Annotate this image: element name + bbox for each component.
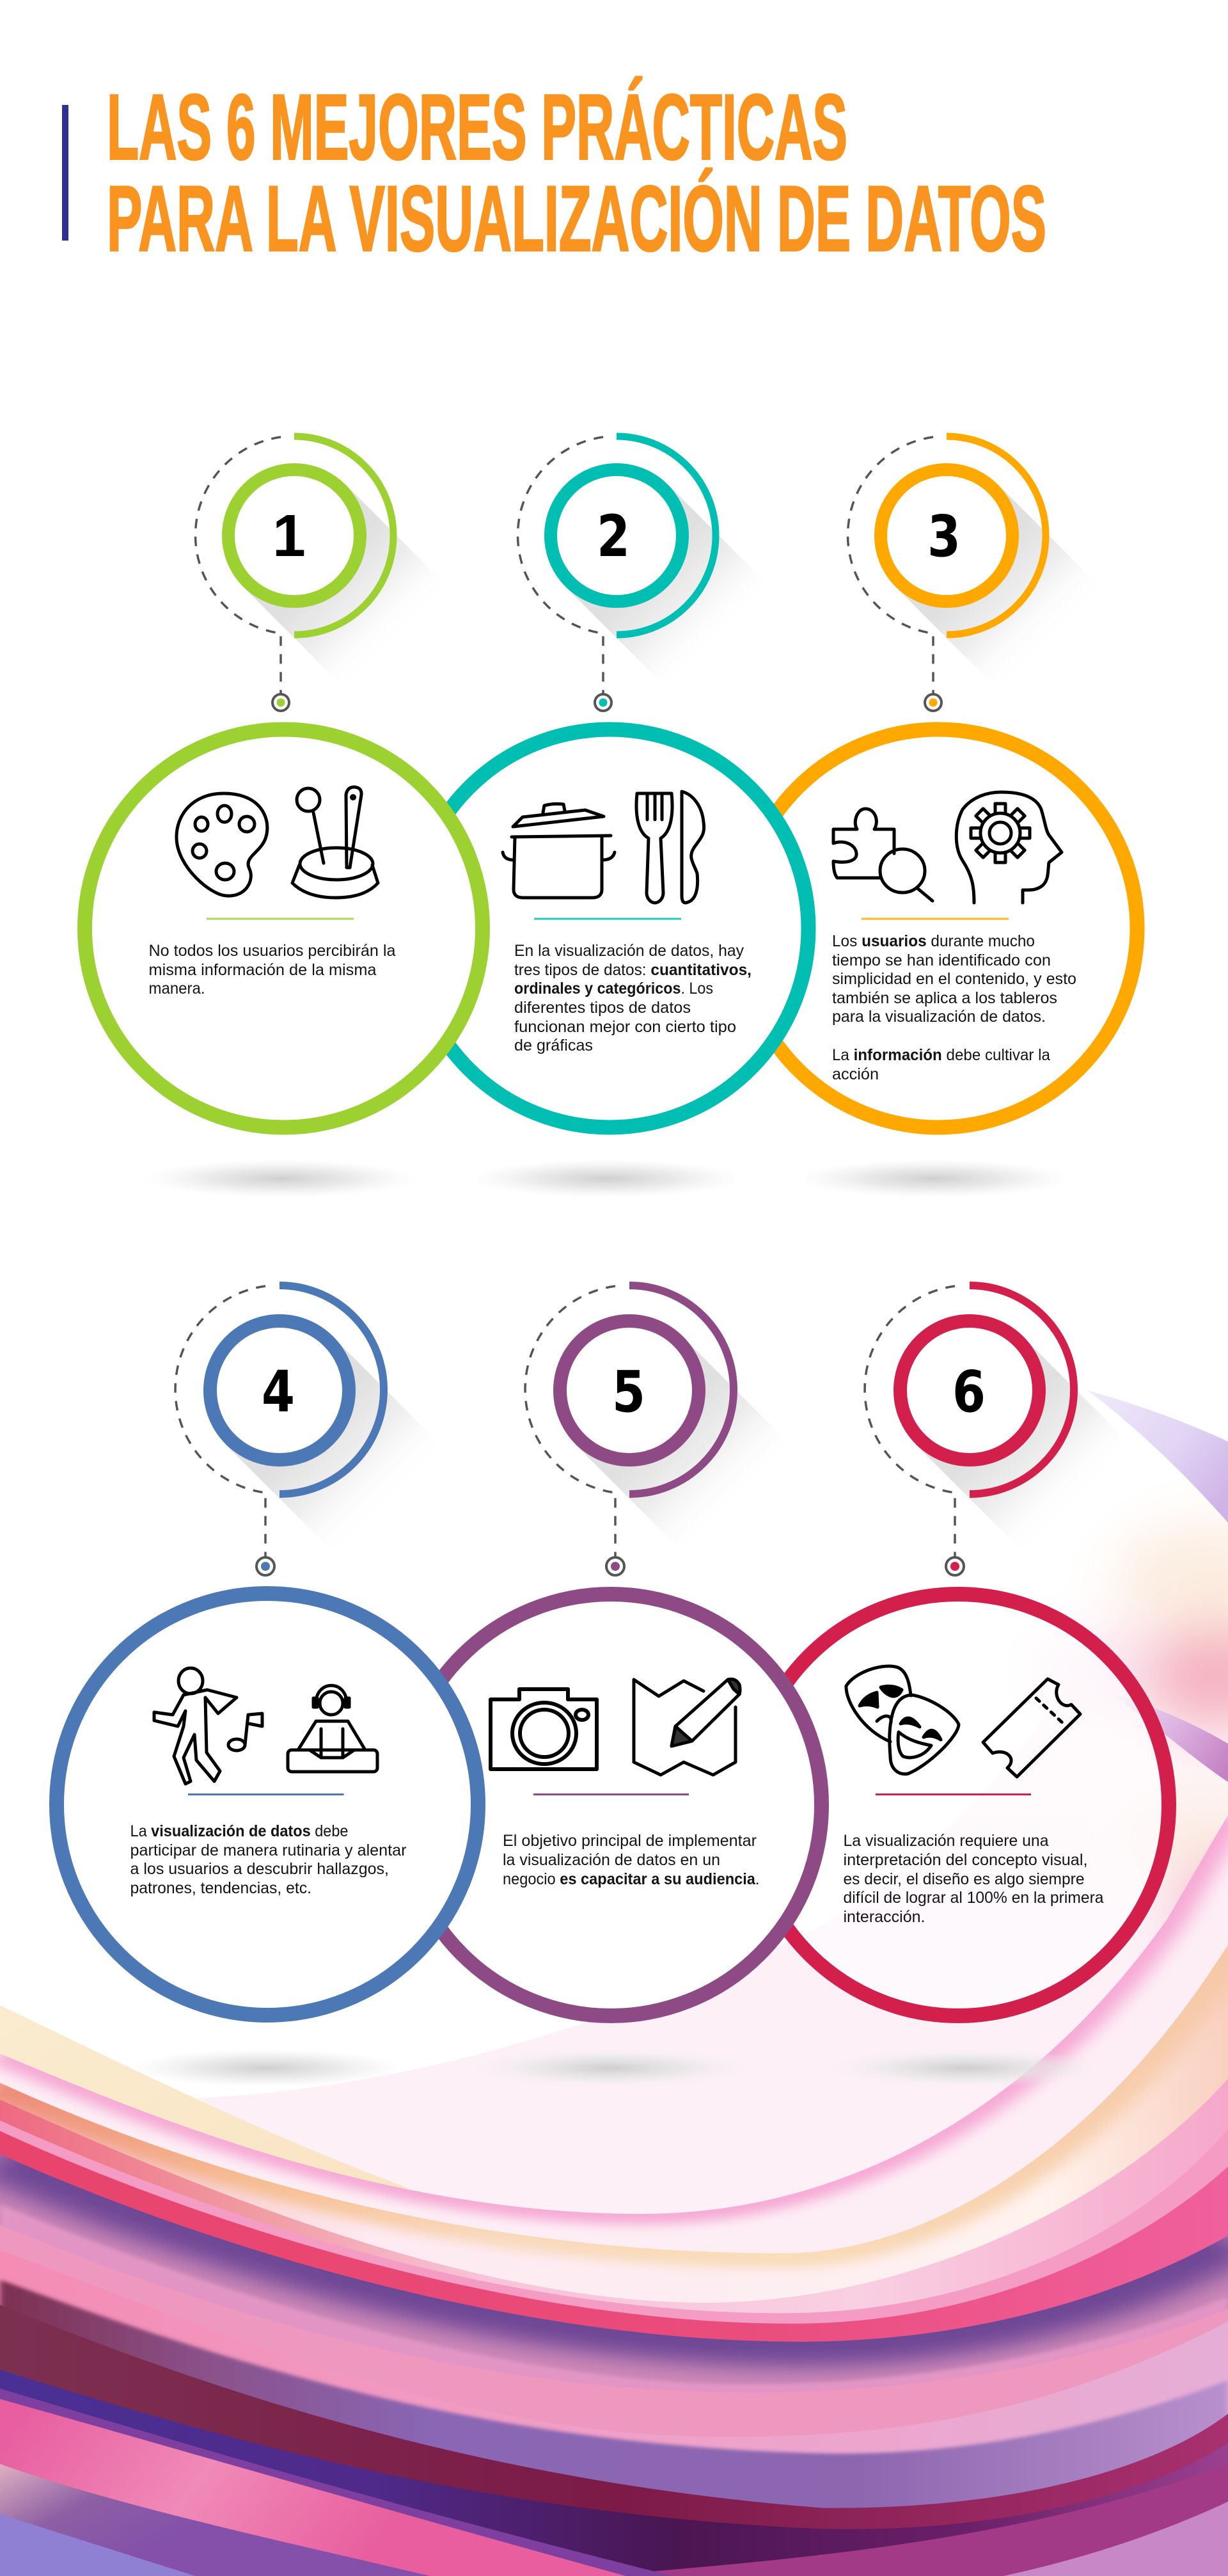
step 2 text: ordinales y categóricos. Los bbox=[514, 980, 713, 998]
step 4 text: a los usuarios a descubrir hallazgos, bbox=[130, 1860, 389, 1878]
title accent bar bbox=[62, 105, 68, 241]
panel: step 6 bbox=[747, 1594, 1169, 2015]
icon: pin cushion bbox=[292, 787, 378, 898]
background swirl bbox=[0, 1390, 1228, 2576]
step 2 text: En la visualización de datos, hay bbox=[514, 942, 744, 960]
step 6 text: La visualización requiere una bbox=[843, 1832, 1049, 1850]
step 2 text: tres tipos de datos: cuantitativos, bbox=[514, 961, 752, 979]
step 4 big circle bbox=[56, 1593, 478, 2015]
icon: DJ at console bbox=[288, 1685, 377, 1772]
step 1 text: manera. bbox=[148, 980, 205, 998]
icon: paint palette bbox=[177, 793, 267, 896]
step 1 divider bbox=[207, 918, 354, 920]
step 5 text: la visualización de datos en un bbox=[503, 1851, 720, 1869]
pale wash bbox=[0, 1459, 1228, 2576]
icon: head with gear bbox=[956, 792, 1062, 903]
long shadows of number badges bbox=[226, 484, 1138, 1560]
step 6 text bbox=[843, 1832, 1104, 1926]
number badge 4: 4 bbox=[262, 1358, 295, 1425]
panel: step 5 bbox=[400, 1594, 821, 2015]
step 5 text bbox=[503, 1832, 760, 1888]
step 4 divider bbox=[188, 1793, 344, 1795]
icon: dancer and music note bbox=[154, 1668, 262, 1784]
step 6 text: difícil de lograr al 100% en la primera bbox=[843, 1889, 1104, 1907]
number badge 5: 5 bbox=[612, 1358, 645, 1425]
ground shadows bbox=[129, 1159, 1105, 2087]
icon: theatre masks bbox=[846, 1666, 959, 1774]
icon: ticket bbox=[983, 1679, 1080, 1777]
step 4 text bbox=[130, 1822, 407, 1897]
step 2 text: de gráficas bbox=[514, 1037, 593, 1054]
step 2 text: diferentes tipos de datos bbox=[514, 999, 691, 1017]
icon: fork and knife bbox=[636, 791, 704, 903]
panel: step 1 bbox=[84, 729, 482, 1127]
step 6 big circle bbox=[747, 1594, 1169, 2015]
step 3 text: también se aplica a los tableros bbox=[832, 989, 1057, 1007]
step 2 text: funcionan mejor con cierto tipo bbox=[514, 1018, 736, 1036]
number badge 6: 6 bbox=[952, 1358, 986, 1425]
title bbox=[107, 76, 1046, 270]
panel: step 4 bbox=[56, 1593, 478, 2015]
step 3 text bbox=[832, 932, 1076, 1083]
step 5 big circle bbox=[400, 1594, 821, 2015]
step 4 text: participar de manera rutinaria y alentar bbox=[130, 1841, 407, 1859]
step 3 text: simplicidad en el contenido, y esto bbox=[832, 970, 1076, 988]
step 5 text: El objetivo principal de implementar bbox=[503, 1832, 757, 1850]
number badge 2 bbox=[518, 436, 716, 711]
number badge 4 bbox=[175, 1285, 384, 1575]
number badge 3 bbox=[848, 436, 1046, 711]
step 4 text: La visualización de datos debe bbox=[130, 1822, 348, 1840]
icon: camera bbox=[491, 1689, 597, 1769]
step 1 text: misma información de la misma bbox=[148, 961, 377, 979]
right edge colour glow bbox=[1036, 1523, 1228, 1958]
number badge 3: 3 bbox=[927, 503, 961, 569]
number badge 5 bbox=[525, 1285, 734, 1575]
step 2 big circle bbox=[411, 729, 808, 1127]
step 6 text: es decir, el diseño es algo siempre bbox=[843, 1870, 1085, 1888]
step 6 text: interacción. bbox=[843, 1908, 925, 1926]
number badge 2: 2 bbox=[597, 503, 630, 569]
step 3 text: para la visualización de datos. bbox=[832, 1008, 1046, 1026]
step 3 text: tiempo se han identificado con bbox=[832, 951, 1051, 969]
step 4 text: patrones, tendencias, etc. bbox=[130, 1879, 311, 1897]
step 1 text bbox=[148, 942, 396, 998]
number badge 1: 1 bbox=[272, 502, 306, 569]
step 3 divider bbox=[862, 918, 1009, 920]
icon: map and pencil bbox=[634, 1679, 740, 1775]
step 5 text: negocio es capacitar a su audiencia. bbox=[503, 1870, 760, 1888]
step 3 big circle bbox=[739, 729, 1137, 1127]
panel: step 2 bbox=[411, 729, 808, 1127]
step 2 divider bbox=[534, 918, 681, 920]
number badge 1 bbox=[196, 436, 393, 711]
step 3 text: acción bbox=[832, 1065, 879, 1083]
icon: puzzle and magnifier bbox=[833, 809, 933, 901]
step 1 text: No todos los usuarios percibirán la bbox=[148, 942, 396, 960]
step 3 text: La información debe cultivar la bbox=[832, 1046, 1050, 1064]
step 6 text: interpretación del concepto visual, bbox=[843, 1851, 1087, 1869]
step 5 divider bbox=[533, 1793, 689, 1795]
lower lilac swoosh bbox=[1108, 1692, 1228, 1782]
panel: step 3 bbox=[739, 729, 1137, 1127]
step 2 text bbox=[514, 942, 752, 1054]
step 1 big circle bbox=[84, 729, 482, 1127]
flowing bands bbox=[0, 1815, 1228, 2576]
upper lilac swoosh bbox=[1087, 1390, 1228, 1523]
step 3 text: Los usuarios durante mucho bbox=[832, 932, 1035, 950]
icon: cooking pot bbox=[503, 804, 615, 898]
number badge 6 bbox=[865, 1285, 1074, 1575]
step 6 divider bbox=[876, 1793, 1031, 1795]
